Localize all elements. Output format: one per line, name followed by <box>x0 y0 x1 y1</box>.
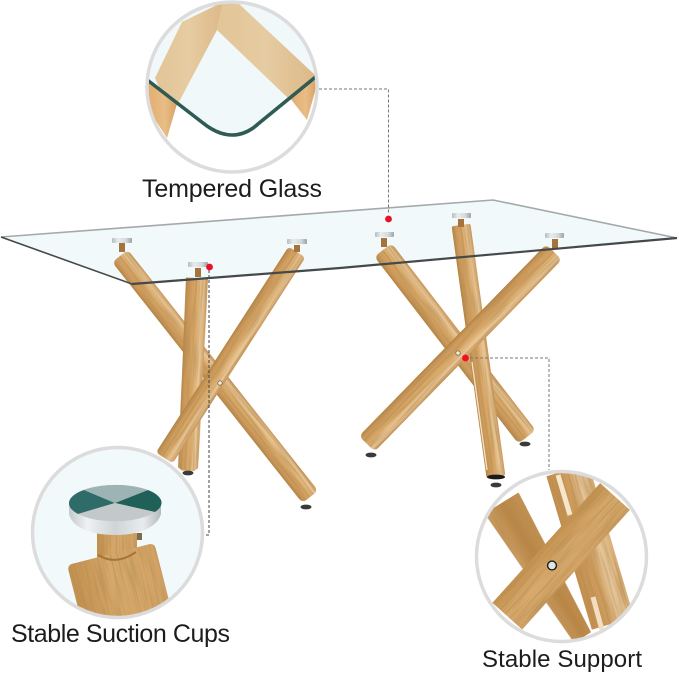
label: tempered glass: Tempered Glass <box>142 175 322 203</box>
bolt <box>548 561 556 570</box>
left table legs <box>112 247 318 503</box>
stem collar <box>98 552 136 560</box>
wood leg below glass: left <box>148 84 177 138</box>
suction cup mounts <box>112 213 564 277</box>
leg highlight lower <box>593 597 602 630</box>
leg highlight upper <box>558 475 570 515</box>
mount screw <box>137 533 142 540</box>
metal disc side <box>69 503 161 535</box>
wood leg behind glass: right <box>217 2 315 100</box>
wood leg behind glass: left <box>155 4 222 102</box>
mount stem <box>97 533 137 558</box>
front diagonal bar <box>492 483 630 630</box>
rear vertical leg <box>546 464 634 630</box>
circle: suction cup close-up <box>30 446 204 620</box>
leg feet <box>182 442 530 509</box>
circle: stable support close-up <box>473 464 651 647</box>
metal disc top <box>69 485 162 521</box>
circle: tempered glass close-up <box>140 0 325 175</box>
wood leg below glass: right <box>290 80 316 120</box>
right table legs <box>359 224 562 478</box>
connector: suction cups <box>204 264 213 535</box>
label: stable suction cups: Stable Suction Cups <box>11 620 230 648</box>
connector: stable support <box>462 355 549 470</box>
glass table top <box>1 200 677 284</box>
glass edge <box>146 75 318 135</box>
connector: tempered glass <box>319 89 392 222</box>
rear diagonal leg <box>488 492 591 640</box>
wood leg base <box>68 544 168 616</box>
glass front edge <box>1 237 677 284</box>
label: stable support: Stable Support <box>482 646 642 673</box>
